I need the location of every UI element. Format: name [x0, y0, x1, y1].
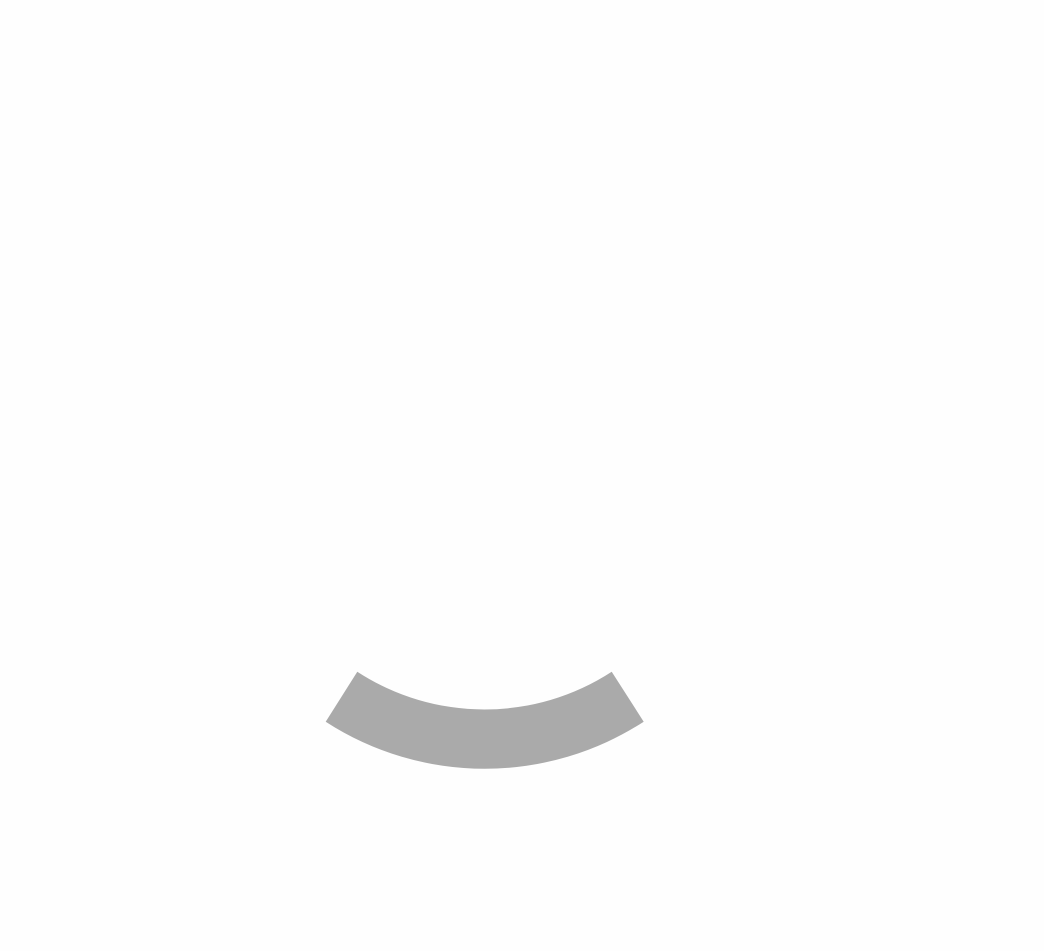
- arc segment: gray gauge band: [326, 672, 644, 769]
